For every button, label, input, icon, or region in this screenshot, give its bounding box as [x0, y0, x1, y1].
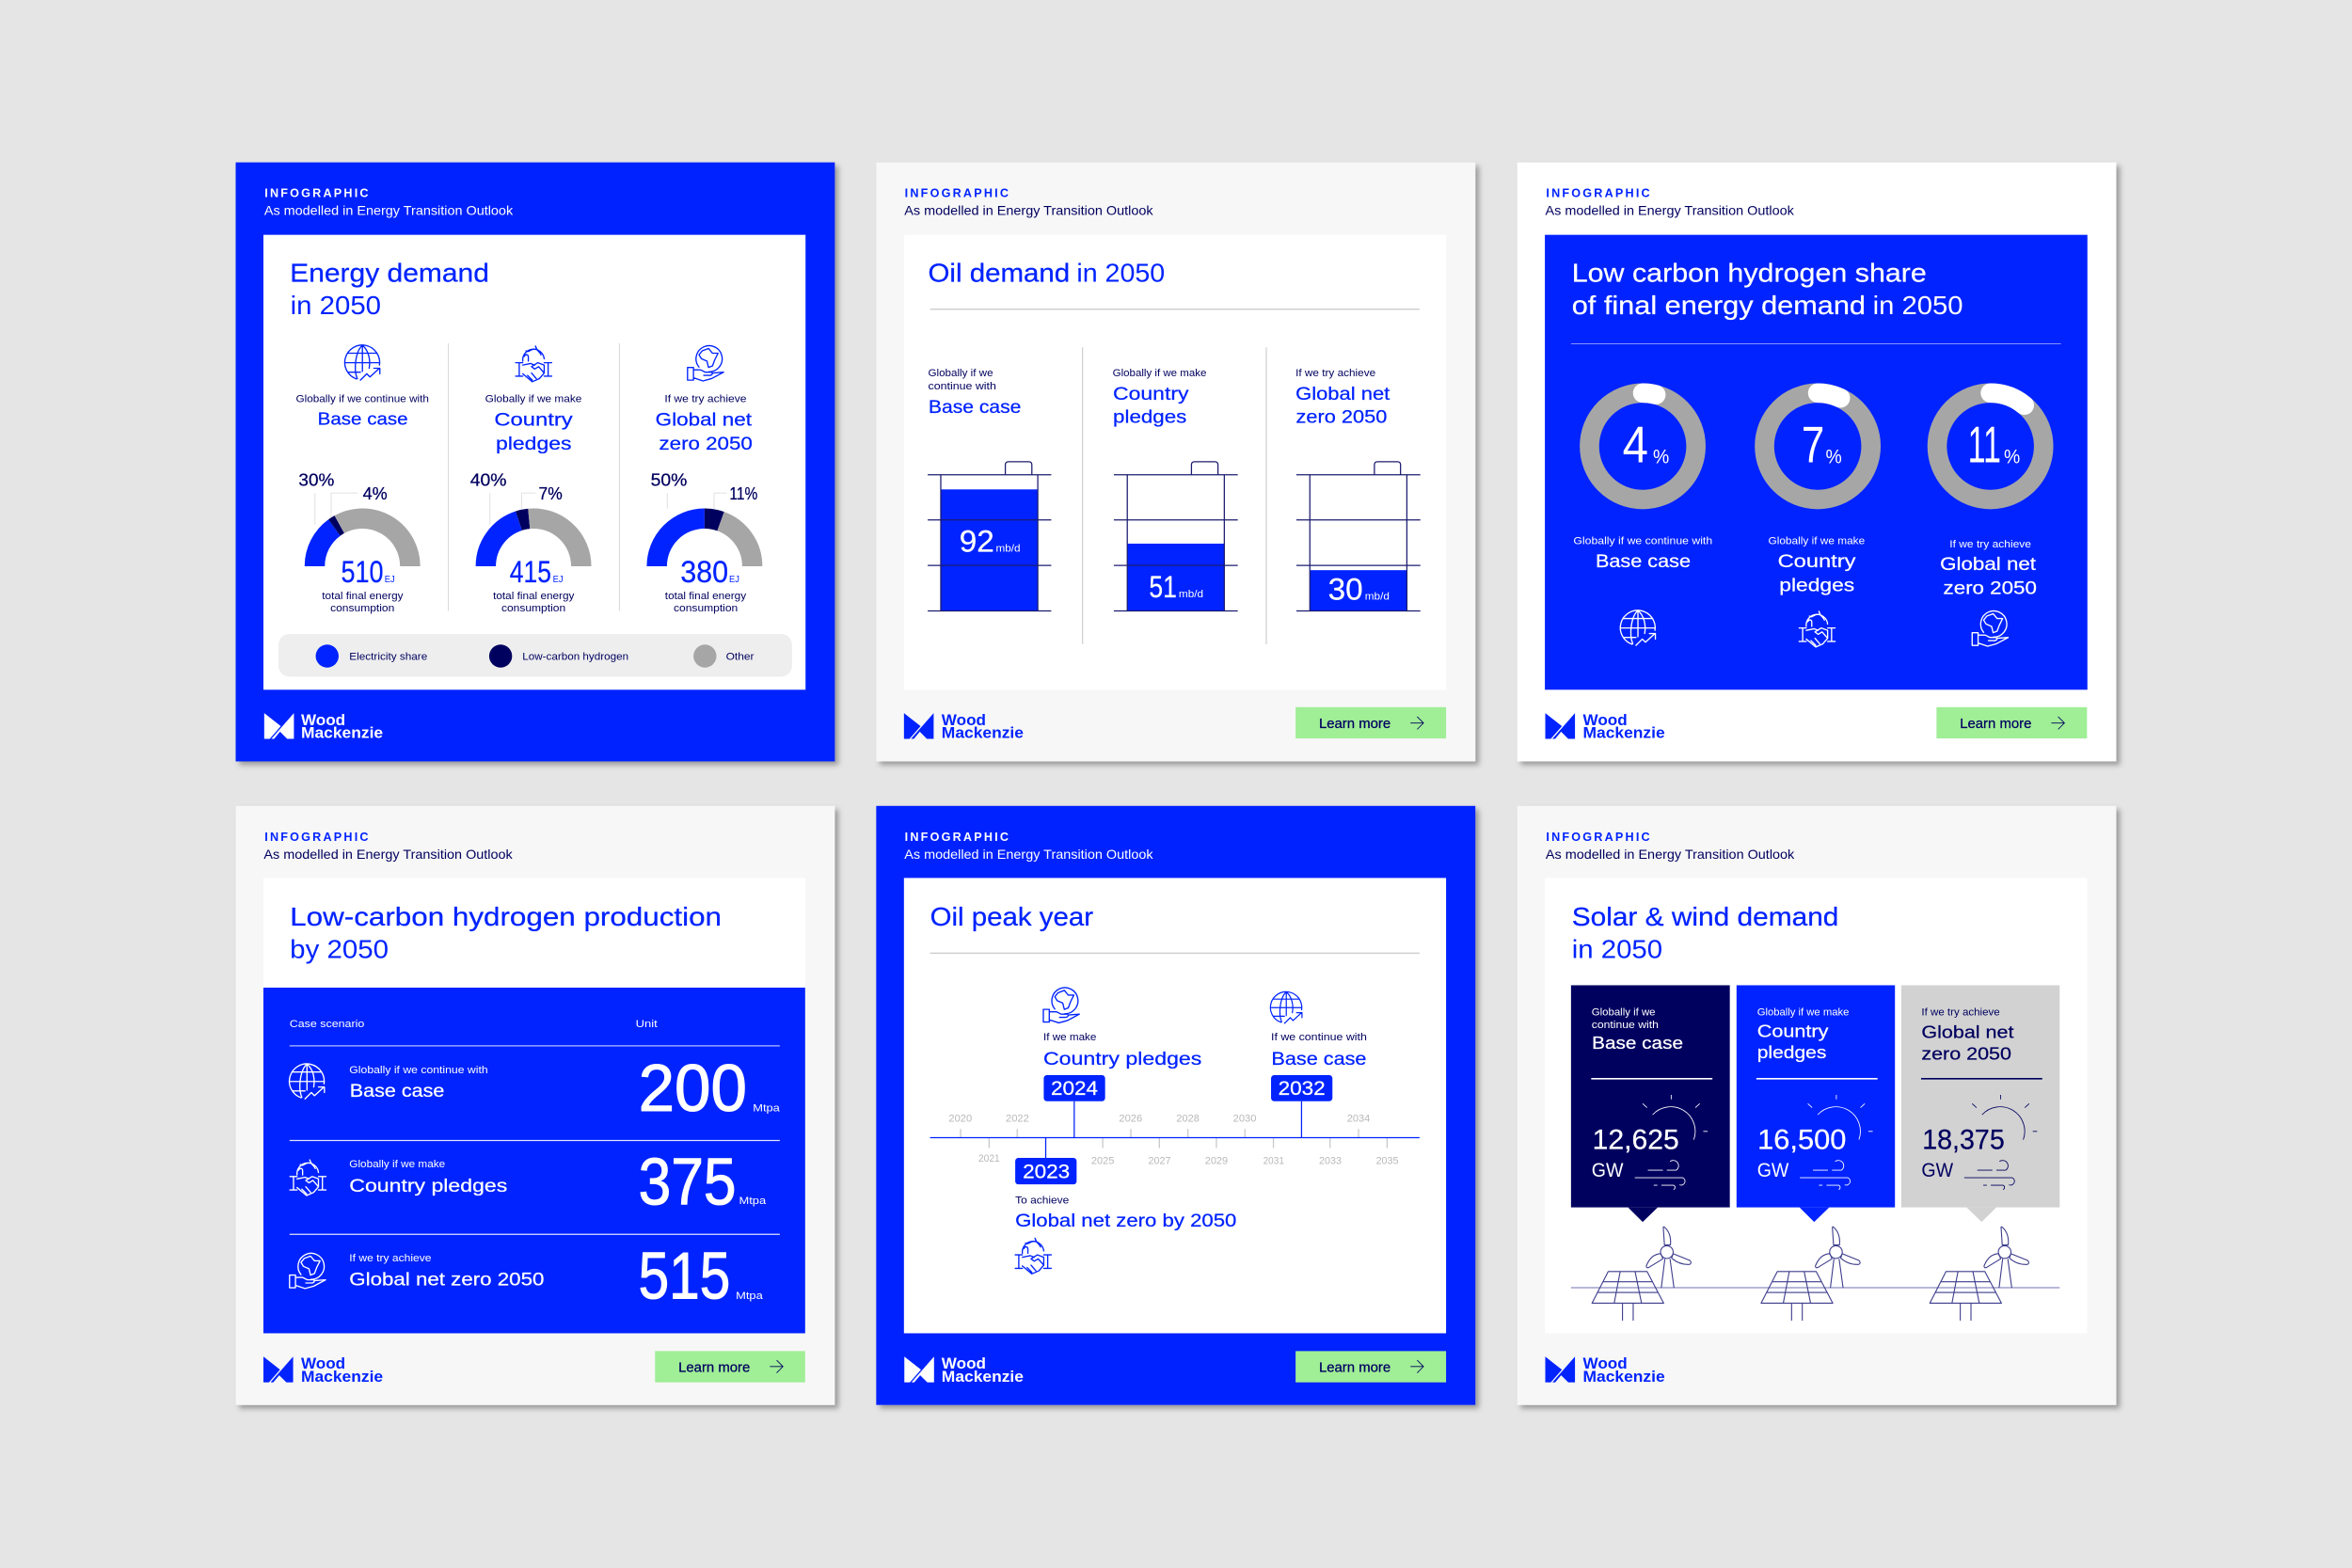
- axis labels: 2033: [1319, 1156, 1342, 1167]
- title: in 2050: [1076, 258, 1165, 287]
- row: global net zero: 515: [639, 1238, 730, 1312]
- header: [1546, 831, 1794, 862]
- logo: Wood: [942, 1354, 986, 1372]
- logo: [264, 711, 383, 742]
- row: base case: [290, 1051, 781, 1125]
- row: global net zero: If we try achieve: [349, 1253, 431, 1264]
- card: low carbon hydrogen share: [1518, 163, 2116, 761]
- card: energy demand: [236, 163, 834, 761]
- row: base case: Mtpa: [753, 1102, 781, 1114]
- icon: globe: [1270, 991, 1302, 1023]
- column: global net zero: %: [2004, 447, 2020, 468]
- barrel chart: [928, 462, 1051, 611]
- panel: base case: Globally if we: [1592, 1006, 1656, 1018]
- column: global net zero: 50%: [651, 470, 687, 490]
- marker: global net zero 2023: [1015, 1158, 1237, 1274]
- header: INFOGRAPHIC: [1546, 187, 1650, 200]
- card: oil peak year: [876, 806, 1475, 1405]
- header: [1546, 187, 1794, 218]
- column: country pledges: Globally if we make: [485, 394, 581, 405]
- column: base case: Base case: [318, 409, 408, 429]
- header: As modelled in Energy Transition Outlook: [1546, 847, 1794, 862]
- barrel chart: 30: [1328, 572, 1363, 606]
- card: low-carbon hydrogen production: [236, 806, 834, 1405]
- marker: global net zero 2023: 2023: [1023, 1161, 1070, 1182]
- panel: global net zero: [1901, 985, 2059, 1222]
- marker: base case 2032: [1270, 991, 1367, 1101]
- button: learn more: [1295, 707, 1446, 738]
- row: base case: 200: [639, 1051, 747, 1125]
- column: global net zero: [1937, 393, 2043, 646]
- button: learn more: Learn more: [678, 1360, 750, 1375]
- header: INFOGRAPHIC: [264, 187, 369, 200]
- header: INFOGRAPHIC: [905, 187, 1009, 200]
- icon: globe: [344, 345, 380, 380]
- column: base case: continue with: [929, 381, 996, 392]
- column: country pledges: total final energy: [493, 591, 575, 602]
- panel: base case: 12,625: [1593, 1125, 1679, 1156]
- column: base case: Globally if we continue with: [296, 394, 429, 405]
- icon: handshake: [1799, 611, 1836, 647]
- panel: base case: Base case: [1592, 1033, 1683, 1053]
- legend: Other: [726, 652, 755, 663]
- title: [1572, 902, 1838, 963]
- column: country pledges: [470, 346, 581, 614]
- row: global net zero: Mtpa: [736, 1291, 764, 1302]
- logo: Mackenzie: [1583, 724, 1665, 742]
- column: global net zero: [651, 346, 757, 614]
- legend: Low-carbon hydrogen: [522, 652, 628, 663]
- column: global net zero: total final energy: [665, 591, 746, 602]
- icon: hand holding globe: [290, 1253, 326, 1289]
- column: base case: consumption: [330, 603, 394, 614]
- icon: handshake: [290, 1160, 326, 1196]
- row: country pledges: Globally if we make: [349, 1159, 445, 1170]
- logo: Mackenzie: [942, 1368, 1024, 1386]
- title: by 2050: [290, 934, 389, 963]
- panel: country pledges: 16,500: [1757, 1125, 1846, 1156]
- column: global net zero: 11: [1968, 415, 2001, 473]
- title: Solar & wind demand: [1572, 902, 1838, 931]
- column: country pledges: Globally if we make: [1113, 368, 1206, 379]
- row: country pledges: 375: [639, 1145, 737, 1219]
- column: country pledges: pledges: [1779, 575, 1854, 595]
- legend: [278, 634, 792, 676]
- column: global net zero: zero 2050: [659, 434, 753, 454]
- legend: Electricity share: [349, 652, 427, 663]
- column: global net zero: 380: [680, 555, 728, 589]
- marker: country pledges 2024: If we make: [1043, 1032, 1096, 1043]
- axis labels: 2026: [1119, 1113, 1142, 1124]
- donut chart: [1937, 393, 2043, 499]
- logo: Mackenzie: [301, 724, 383, 742]
- title: [929, 258, 1165, 287]
- row: base case: Globally if we continue with: [349, 1065, 488, 1076]
- title: [1572, 259, 1963, 320]
- column: base case: [1573, 393, 1712, 645]
- logo: Wood: [301, 1354, 345, 1372]
- header: As modelled in Energy Transition Outlook: [904, 203, 1153, 218]
- column: base case: total final energy: [322, 591, 404, 602]
- column: base case: 4%: [363, 483, 388, 503]
- column: country pledges: 40%: [470, 470, 506, 490]
- title: [290, 259, 489, 320]
- icon: solar panel and turbine 1: [1592, 1227, 1691, 1321]
- header: INFOGRAPHIC: [1546, 831, 1650, 844]
- column: country pledges: Country: [494, 410, 573, 431]
- icon: globe: [1620, 610, 1656, 645]
- axis labels: 2030: [1233, 1113, 1256, 1124]
- logo: [263, 1354, 383, 1386]
- panel: country pledges: GW: [1757, 1160, 1789, 1181]
- icon: solar panel and turbine 3: [1930, 1227, 2028, 1321]
- logo: Wood: [301, 711, 345, 729]
- title: Low-carbon hydrogen production: [290, 902, 722, 931]
- column: country pledges: EJ: [553, 575, 564, 585]
- icon: sun and wind: [1964, 1095, 2037, 1190]
- panel: country pledges: [1737, 985, 1895, 1222]
- card: solar and wind demand: [1518, 806, 2116, 1405]
- barrel chart: 92: [960, 524, 994, 558]
- header: As modelled in Energy Transition Outlook: [1546, 203, 1794, 218]
- column: base case: 4: [1623, 415, 1648, 473]
- marker: base case 2032: 2032: [1279, 1078, 1326, 1100]
- button: learn more: [1295, 1351, 1446, 1383]
- column: global net zero: Global net: [1295, 384, 1391, 404]
- header: [263, 831, 513, 862]
- column: base case: 30%: [298, 470, 334, 490]
- header: [904, 831, 1153, 862]
- logo: Mackenzie: [301, 1368, 383, 1386]
- title: of final energy demand: [1572, 291, 1866, 320]
- button: learn more: Learn more: [1319, 1360, 1391, 1375]
- logo: Wood: [942, 711, 986, 729]
- column: base case: %: [1653, 447, 1669, 468]
- gauge chart: [314, 518, 410, 566]
- column: global net zero: [1295, 368, 1421, 611]
- axis labels: [948, 1113, 1399, 1167]
- panel: global net zero: zero 2050: [1921, 1044, 2011, 1064]
- axis labels: 2027: [1149, 1156, 1171, 1167]
- title: in 2050: [1572, 934, 1662, 963]
- icon: globe: [290, 1064, 325, 1099]
- column: country pledges: pledges: [496, 434, 571, 454]
- button: learn more: Learn more: [1319, 717, 1391, 732]
- illustration: solar panels and wind turbines: [1571, 1227, 2059, 1321]
- column: country pledges: %: [1826, 447, 1842, 468]
- marker: base case 2032: If we continue with: [1271, 1032, 1367, 1043]
- column: base case: Globally if we continue with: [1573, 535, 1712, 546]
- header: [904, 187, 1153, 218]
- column: country pledges: 7%: [539, 483, 563, 503]
- column: country pledges: Globally if we make: [1768, 535, 1865, 546]
- column: global net zero: Global net: [656, 410, 753, 431]
- column: base case: Globally if we: [929, 368, 993, 379]
- panel: global net zero: GW: [1921, 1160, 1953, 1181]
- panel: base case: [1571, 985, 1730, 1222]
- title: in 2050: [291, 291, 381, 320]
- gauge chart: [657, 518, 753, 566]
- button: learn more: [1936, 707, 2087, 738]
- row: country pledges: Country pledges: [349, 1176, 507, 1196]
- column: base case: [928, 368, 1051, 611]
- logo: Mackenzie: [1583, 1368, 1665, 1386]
- header: INFOGRAPHIC: [905, 831, 1009, 844]
- panel: base case: GW: [1592, 1160, 1624, 1181]
- title: [290, 902, 722, 963]
- column: global net zero: zero 2050: [1944, 578, 2037, 598]
- column: global net zero: EJ: [729, 575, 739, 585]
- title: in 2050: [1873, 291, 1963, 320]
- column: country pledges: pledges: [1113, 407, 1186, 428]
- column: base case: Base case: [1596, 551, 1691, 572]
- marker: global net zero 2023: To achieve: [1015, 1195, 1069, 1206]
- column: country pledges: [1764, 393, 1871, 647]
- column: country pledges: [1113, 368, 1238, 611]
- donut chart: [1589, 393, 1696, 499]
- column: global net zero: 11%: [729, 483, 757, 503]
- panel: global net zero: Global net: [1921, 1022, 2014, 1041]
- header: INFOGRAPHIC: [264, 831, 369, 844]
- logo: [904, 711, 1024, 742]
- header: As modelled in Energy Transition Outlook: [264, 203, 513, 218]
- barrel chart: mb/d: [1179, 589, 1203, 600]
- column: global net zero: zero 2050: [1296, 407, 1388, 428]
- table panel: Unit: [636, 1019, 659, 1030]
- row: base case: Base case: [350, 1081, 444, 1101]
- title: Energy demand: [290, 259, 489, 288]
- row: global net zero: [290, 1238, 764, 1312]
- marker: base case 2032: Base case: [1271, 1049, 1366, 1069]
- title: Oil demand: [929, 258, 1070, 287]
- axis labels: 2034: [1347, 1113, 1370, 1124]
- gauge chart: [485, 518, 581, 566]
- icon: hand holding globe: [688, 346, 723, 381]
- icon: solar panel and turbine 2: [1761, 1227, 1860, 1321]
- panel: country pledges: Country: [1757, 1022, 1829, 1041]
- row: global net zero: Global net zero 2050: [349, 1270, 545, 1291]
- icon: hand holding globe: [1043, 988, 1079, 1022]
- icon: handshake: [516, 346, 551, 382]
- table panel: [263, 988, 805, 1333]
- axis labels: 2025: [1091, 1156, 1114, 1167]
- axis labels: 2020: [948, 1113, 972, 1124]
- axis labels: 2022: [1006, 1113, 1029, 1124]
- axis labels: 2035: [1376, 1156, 1399, 1167]
- icon: hand holding globe: [1972, 611, 2009, 646]
- column: global net zero: consumption: [674, 603, 738, 614]
- logo: [904, 1354, 1024, 1386]
- table panel: Case scenario: [290, 1019, 364, 1030]
- column: country pledges: consumption: [501, 603, 565, 614]
- icon: sun and wind: [1800, 1095, 1873, 1190]
- column: country pledges: Country: [1778, 551, 1856, 572]
- column: global net zero: If we try achieve: [664, 394, 747, 405]
- button: learn more: Learn more: [1960, 717, 2031, 732]
- row: country pledges: Mtpa: [739, 1196, 767, 1207]
- column: country pledges: 7: [1802, 415, 1824, 473]
- title: Low carbon hydrogen share: [1572, 259, 1927, 288]
- panel: global net zero: 18,375: [1922, 1125, 2005, 1156]
- card: oil demand: [876, 163, 1475, 761]
- panel: country pledges: Globally if we make: [1757, 1006, 1849, 1018]
- marker: country pledges 2024: 2024: [1051, 1078, 1098, 1100]
- logo: Wood: [1583, 711, 1628, 729]
- axis labels: 2031: [1263, 1156, 1284, 1167]
- panel: global net zero: If we try achieve: [1921, 1006, 2000, 1018]
- column: base case: 510: [341, 555, 384, 589]
- donut chart: [1764, 393, 1871, 499]
- icon: handshake: [1015, 1238, 1051, 1274]
- column: country pledges: Country: [1113, 384, 1189, 404]
- panel: country pledges: pledges: [1757, 1042, 1826, 1062]
- logo: Mackenzie: [942, 724, 1024, 742]
- marker: country pledges 2024: [1043, 988, 1201, 1101]
- column: global net zero: If we try achieve: [1295, 368, 1375, 379]
- marker: country pledges 2024: Country pledges: [1043, 1049, 1201, 1069]
- logo: Wood: [1583, 1354, 1628, 1372]
- timeline chart: [930, 1101, 1420, 1167]
- icon: sun and wind: [1635, 1095, 1708, 1190]
- column: base case: Base case: [929, 397, 1021, 418]
- header: As modelled in Energy Transition Outlook: [263, 847, 513, 862]
- barrel chart: 51: [1149, 570, 1177, 604]
- barrel chart: [1296, 462, 1421, 611]
- header: As modelled in Energy Transition Outlook: [904, 847, 1153, 862]
- column: global net zero: Global net: [1940, 554, 2037, 575]
- title: Oil peak year: [930, 902, 1093, 931]
- column: base case: EJ: [385, 575, 395, 585]
- marker: global net zero 2023: Global net zero by 2050: [1015, 1211, 1237, 1231]
- column: global net zero: If we try achieve: [1949, 539, 2031, 550]
- axis labels: 2028: [1176, 1113, 1200, 1124]
- row: country pledges: [290, 1145, 767, 1219]
- axis labels: 2021: [978, 1153, 1000, 1164]
- barrel chart: [1114, 462, 1238, 611]
- barrel chart: mb/d: [995, 543, 1021, 554]
- logo: [1546, 1354, 1665, 1386]
- panel: base case: continue with: [1592, 1020, 1659, 1031]
- logo: [1546, 711, 1665, 742]
- axis labels: 2029: [1205, 1156, 1228, 1167]
- barrel chart: mb/d: [1365, 591, 1390, 602]
- header: [264, 187, 513, 218]
- column: base case: [296, 345, 429, 614]
- column: country pledges: 415: [510, 555, 551, 589]
- button: learn more: [655, 1351, 805, 1383]
